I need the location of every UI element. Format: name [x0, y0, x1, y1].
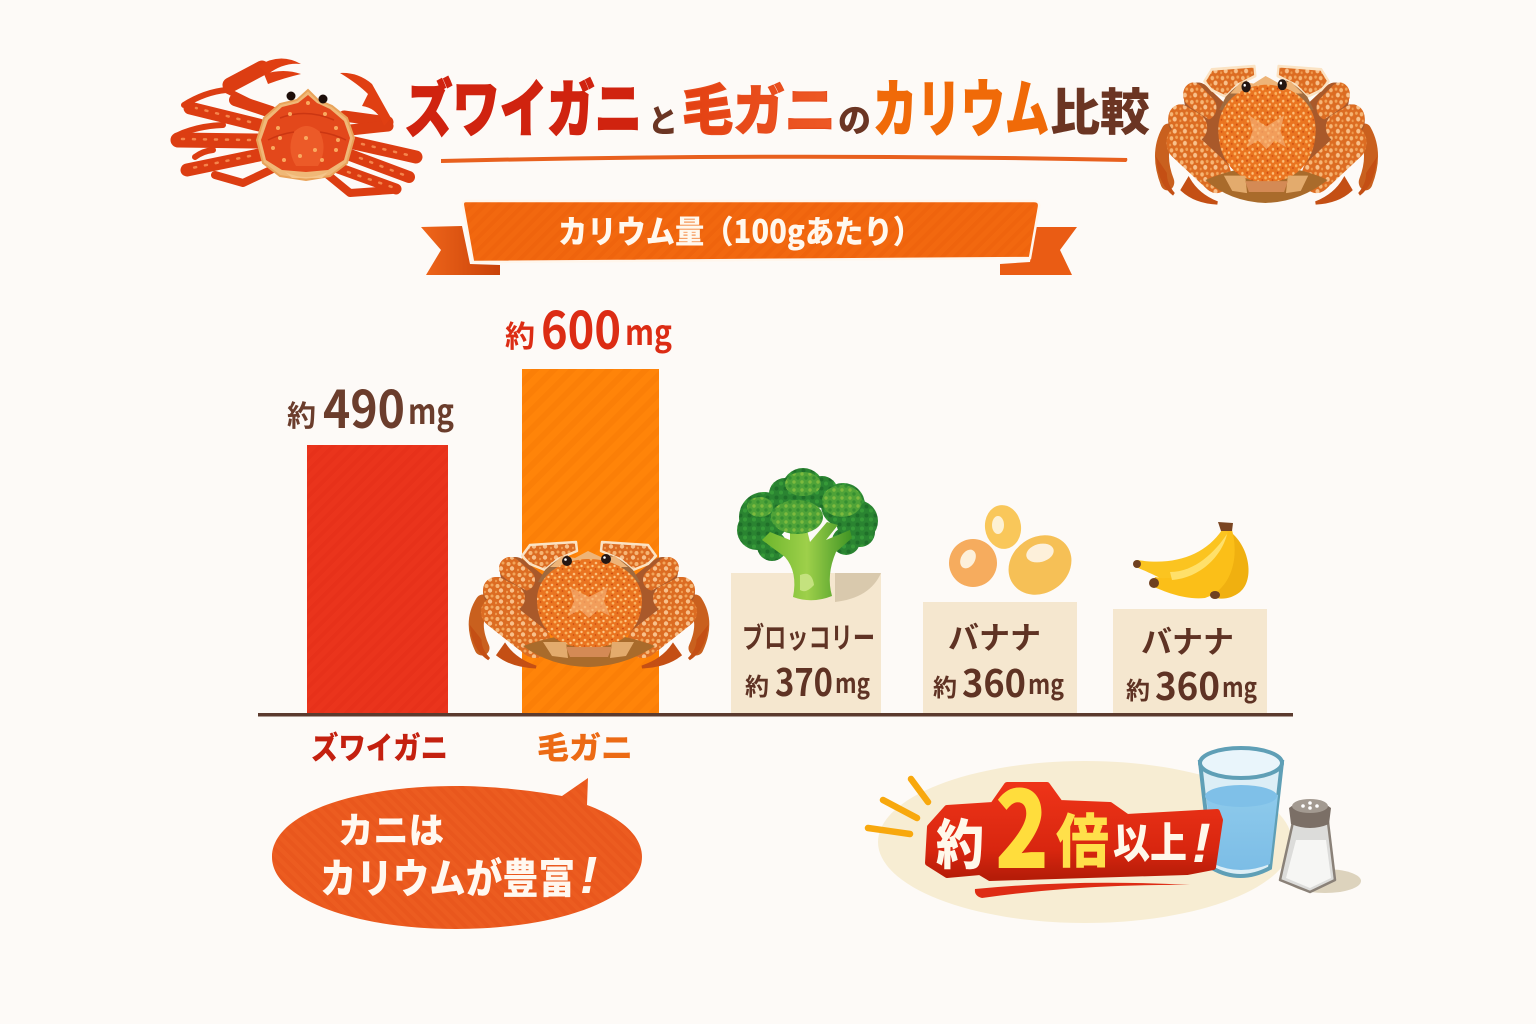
box: banana value [1113, 609, 1267, 713]
value: 490mg: 490 [323, 368, 405, 443]
bubble text line 1: カニは [338, 802, 444, 854]
axis line [258, 713, 1293, 716]
ribbon text: カリウム量（100gあたり） [558, 207, 922, 253]
box: banana value: 約 [1126, 671, 1150, 706]
icon: horsehair crab top right [1158, 66, 1375, 203]
badge red backing [928, 785, 1220, 878]
box: broccoli: mg [835, 662, 870, 701]
badge word: times: 倍 [1056, 795, 1109, 879]
bar chart [258, 289, 1293, 768]
box: banana value: mg [1222, 666, 1257, 705]
icon: bananas [1133, 522, 1249, 599]
bubble exclamation: ! [580, 847, 597, 905]
ribbon body [463, 201, 1039, 262]
value: 600mg: 600 [541, 289, 621, 364]
value: 490mg: mg [408, 384, 454, 435]
salt shadow [1289, 869, 1361, 893]
icon: glass of water [1200, 748, 1282, 876]
bar: snow crab [307, 445, 448, 714]
badge number 2: 2 [995, 745, 1049, 899]
badge exclamation: ! [1192, 811, 1211, 874]
callout: crab is rich in potassium [272, 778, 642, 929]
value: 600mg: mg [625, 305, 672, 356]
badge underline [975, 883, 1190, 898]
box: soybeans value [923, 602, 1077, 713]
box: soybeans value: 約 [933, 668, 957, 703]
bubble text line 2: カリウムが豊富 [320, 845, 575, 905]
icon: soybeans [949, 503, 1083, 607]
title: horsehair crab: 毛ガニ [682, 66, 836, 146]
box: soybeans value: バナナ [948, 613, 1041, 658]
box: broccoli: 370 [775, 652, 833, 707]
value: 490mg: 約 [287, 393, 316, 435]
badge text: more than double [928, 745, 1220, 899]
box: broccoli: ブロッコリー [742, 615, 875, 657]
title: particle no: の [838, 94, 871, 142]
value: 600mg [505, 289, 672, 364]
callout: more than double [868, 745, 1361, 923]
box: banana value: 360 [1155, 656, 1220, 711]
burst lines [868, 779, 928, 834]
title [405, 59, 1150, 149]
ribbon right tail [1000, 227, 1077, 275]
ribbon left tail [421, 226, 500, 275]
box: soybeans value: 360 [962, 653, 1026, 708]
label: horsehair crab: 毛ガニ [537, 723, 633, 768]
icon: broccoli [737, 468, 878, 600]
box: broccoli: 約 [745, 667, 769, 702]
icon: horsehair crab on bar [472, 542, 706, 667]
beige oval [878, 761, 1292, 923]
title: comparison: 比較 [1050, 73, 1150, 145]
bar: horsehair crab [522, 369, 659, 714]
value: 600mg: 約 [505, 312, 535, 356]
title: particle to: と [648, 96, 678, 142]
badge word: approx: 約 [936, 801, 984, 880]
box: broccoli [731, 573, 881, 713]
box: banana value: バナナ [1141, 617, 1234, 662]
badge word: or more: 以上 [1113, 810, 1187, 871]
ribbon: potassium amount per 100g [421, 201, 1077, 275]
title underline [441, 155, 1127, 163]
icon: snow crab [176, 58, 416, 193]
title: snow crab: ズワイガニ [405, 59, 642, 149]
value: 490mg [287, 368, 454, 443]
box: soybeans value: mg [1028, 663, 1064, 702]
title: potassium: カリウム [873, 59, 1049, 149]
label: snow crab: ズワイガニ [311, 723, 448, 768]
icon: salt shaker [1280, 799, 1335, 892]
speech bubble [272, 778, 642, 929]
